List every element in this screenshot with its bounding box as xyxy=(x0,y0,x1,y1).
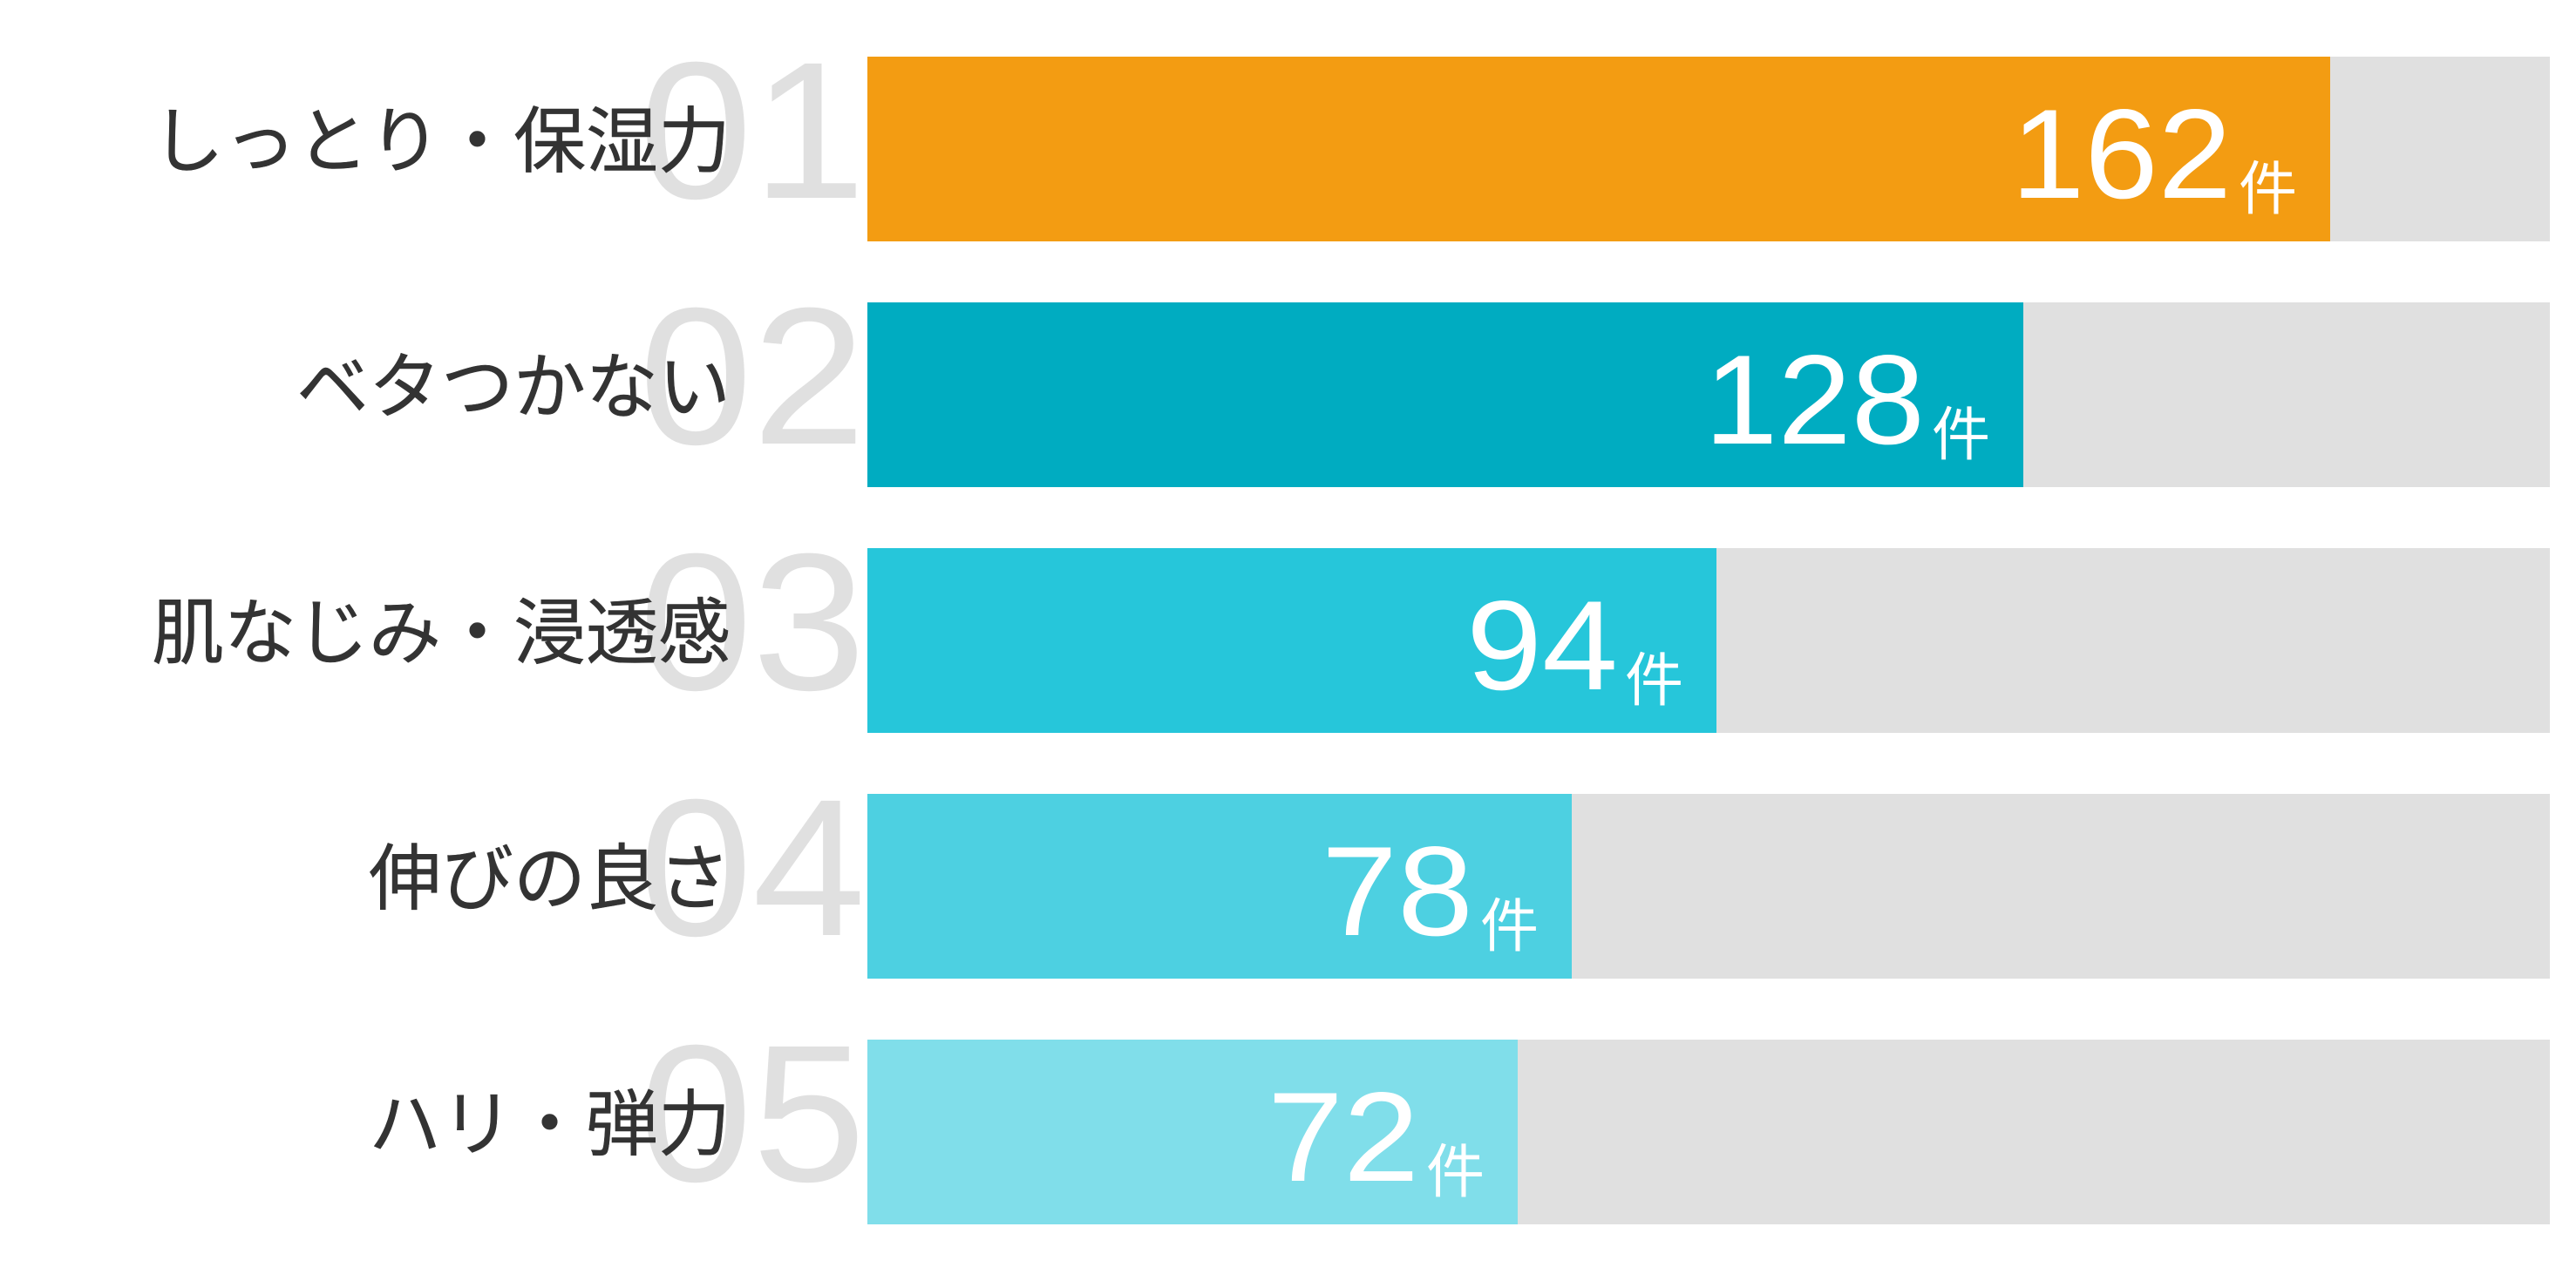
row 2: ベタつかない: 128 xyxy=(1704,329,1925,471)
row 5: ハリ・弾力: 05 xyxy=(639,1005,866,1223)
row 1: しっとり・保湿力: 162 xyxy=(2011,83,2232,225)
row 2: ベタつかない xyxy=(296,268,2550,487)
row 3: 肌なじみ・浸透感: 件 xyxy=(1625,648,1683,714)
row 1: しっとり・保湿力: 01 xyxy=(639,22,866,240)
row 2: ベタつかない: 件 xyxy=(1932,403,1990,468)
row 2: ベタつかない: 02 xyxy=(639,268,866,485)
row 1: しっとり・保湿力: 件 xyxy=(2239,157,2297,222)
row 3: 肌なじみ・浸透感: 03 xyxy=(639,513,866,731)
row 5: ハリ・弾力: 72 xyxy=(1268,1066,1419,1208)
row 4: 伸びの良さ xyxy=(369,759,2550,979)
row 4: 伸びの良さ: 78 xyxy=(1322,820,1473,962)
row 3: 肌なじみ・浸透感 xyxy=(152,513,2550,733)
row 4: 伸びの良さ: 件 xyxy=(1480,894,1539,959)
row 5: ハリ・弾力: ハリ・弾力 xyxy=(369,1084,731,1165)
row 4: 伸びの良さ: 伸びの良さ xyxy=(369,838,731,919)
row 3: 肌なじみ・浸透感: 94 xyxy=(1466,574,1618,716)
row 1: しっとり・保湿力 xyxy=(152,22,2550,241)
row 5: ハリ・弾力 xyxy=(369,1005,2550,1224)
row 2: ベタつかない: ベタつかない xyxy=(296,347,731,428)
row 3: 肌なじみ・浸透感: 肌なじみ・浸透感 xyxy=(152,593,731,674)
row 4: 伸びの良さ: 04 xyxy=(639,759,866,977)
row 1: しっとり・保湿力: しっとり・保湿力 xyxy=(152,101,731,182)
row 5: ハリ・弾力: 件 xyxy=(1426,1140,1485,1205)
